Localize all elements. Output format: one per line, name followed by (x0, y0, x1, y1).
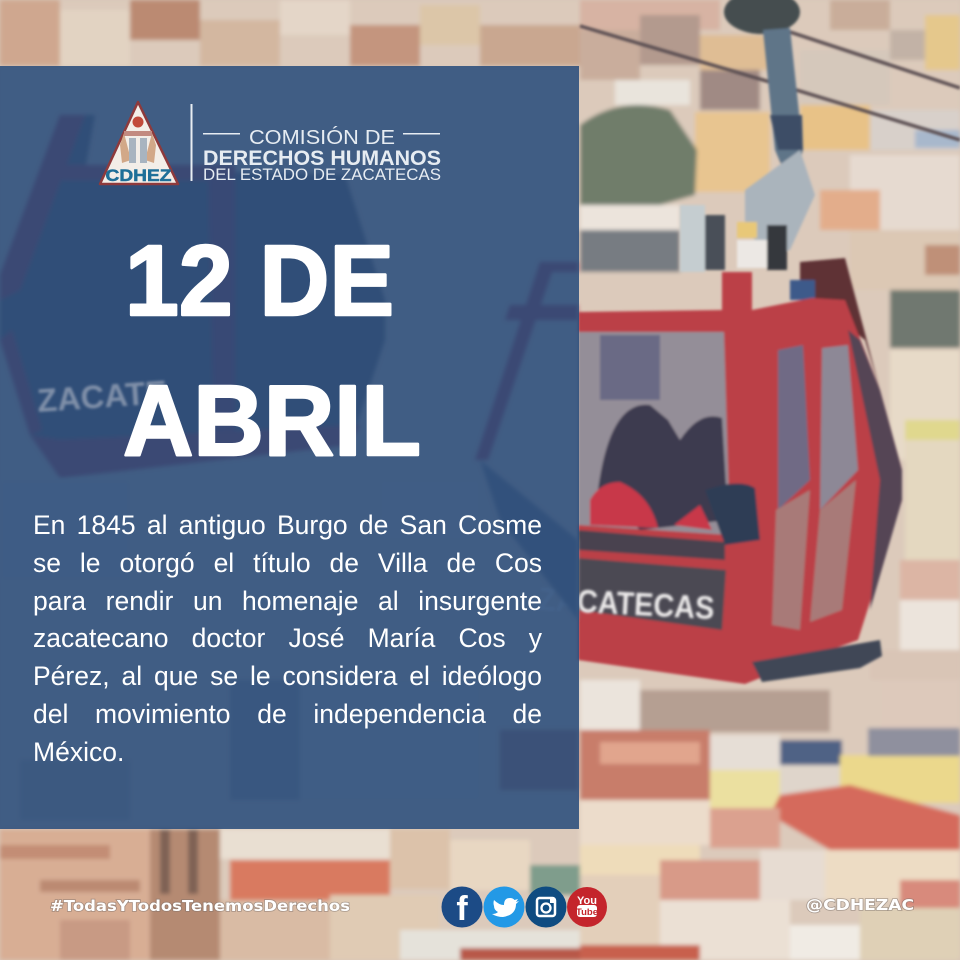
body text: se le otorgó el título de Villa de Cos (33, 548, 542, 578)
logo text: institution name (203, 126, 441, 184)
pale buildings beneath panel (300, 680, 480, 800)
right car lettering: ZACATECAS (538, 581, 715, 626)
logo text: institution name: DEL ESTADO DE ZACATECAS (203, 165, 441, 184)
left car lettering: ZACATE (36, 374, 168, 419)
logo: CDHEZ triangle: CDHEZ (106, 166, 172, 185)
lower left city (0, 829, 150, 960)
left cable car behind panel (0, 115, 578, 820)
logo divider (190, 104, 192, 181)
icon: youtube (567, 887, 607, 927)
icon: twitter (484, 886, 524, 928)
icon: youtube: Tube (576, 907, 598, 918)
icon: facebook (442, 886, 482, 928)
title: date: 12 DE (125, 225, 394, 337)
logo: CDHEZ triangle (100, 102, 178, 185)
body text (33, 510, 542, 767)
body text: zacatecano doctor José María Cos y (33, 623, 542, 653)
hashtag: #TodasYTodosTenemosDerechos (50, 897, 350, 915)
body text: Pérez, al que se le considera el ideólogo (33, 661, 542, 691)
social handle: @CDHEZAC (806, 896, 914, 914)
logo text: institution name: COMISIÓN DE (249, 126, 395, 149)
icon: youtube: You (577, 895, 597, 907)
cables and mast (580, 26, 960, 140)
panel: blue overlay (0, 66, 579, 829)
title: date (123, 225, 421, 477)
right cable car (578, 272, 902, 684)
lower right city (580, 680, 640, 730)
mid right city (890, 350, 960, 460)
social icons (442, 886, 607, 928)
body text: En 1845 al antiguo Burgo de San Cosme (33, 510, 542, 540)
top strip (0, 0, 60, 66)
body text: del movimiento de independencia de (33, 699, 542, 729)
logo text: institution name: DERECHOS HUMANOS (203, 147, 441, 170)
icon: instagram (526, 886, 566, 928)
body text: México. (33, 737, 124, 767)
right car frame inside panel (475, 262, 578, 460)
title: date: ABRIL (123, 365, 421, 477)
upper right city (580, 0, 720, 30)
body text: para rendir un homenaje al insurgente (33, 586, 542, 616)
icon: facebook: f (456, 890, 468, 928)
